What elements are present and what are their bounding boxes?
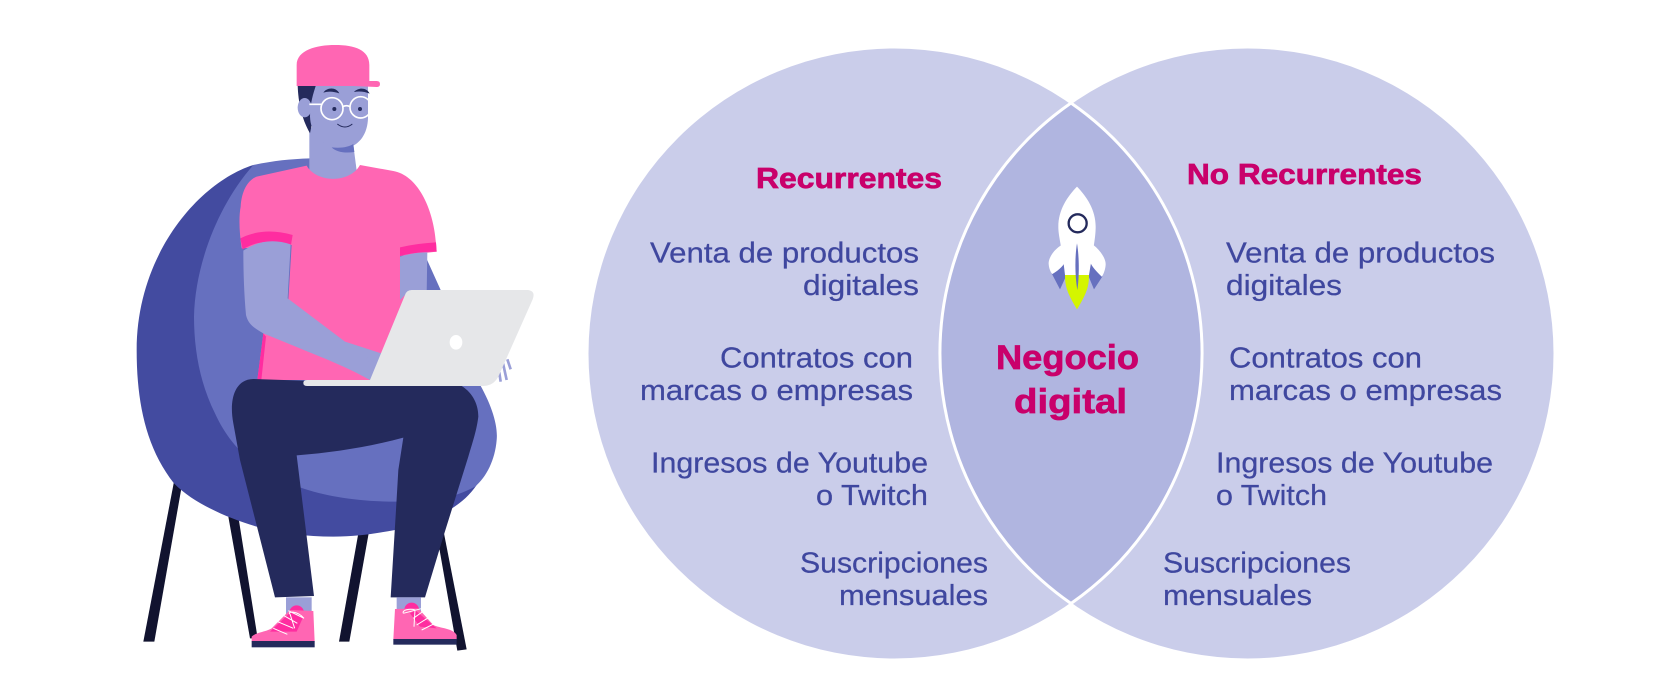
smile	[337, 124, 352, 127]
item: Ingresos de Youtube o Twitch	[651, 447, 928, 512]
item: Contratos con marcas o empresas	[640, 342, 913, 407]
item: Contratos con marcas o empresas: marcas o empresas	[640, 375, 913, 407]
item: Ingresos de Youtube o Twitch: o Twitch	[1216, 480, 1327, 512]
cap	[297, 45, 380, 87]
item: Suscripciones mensuales: Suscripciones	[1163, 547, 1351, 579]
centre label: Negocio digital: digital	[1014, 383, 1127, 421]
shirt edge shadow	[257, 333, 266, 380]
eyes	[332, 107, 362, 111]
rocket body	[1058, 187, 1096, 275]
rocket side fins	[1052, 262, 1102, 289]
item: Venta de productos digitales: Venta de productos	[650, 237, 919, 269]
right column: No Recurrentes	[1163, 159, 1502, 612]
rocket wings	[1049, 245, 1106, 277]
icon: rocket	[1049, 187, 1106, 309]
centre label: Negocio digital: Negocio	[996, 339, 1139, 377]
item: Ingresos de Youtube o Twitch	[1216, 447, 1493, 512]
centre label: Negocio digital	[996, 339, 1139, 421]
infographic canvas	[136, 45, 1554, 658]
eyebrows	[323, 88, 370, 94]
trousers	[232, 379, 478, 597]
item: Suscripciones mensuales: Suscripciones	[800, 547, 988, 579]
item: Suscripciones mensuales: mensuales	[1163, 580, 1312, 612]
left circle	[588, 48, 1200, 658]
glasses	[309, 97, 371, 120]
rocket centre fin	[1075, 243, 1079, 290]
item: Contratos con marcas o empresas: Contratos con	[720, 342, 913, 374]
sleeve cuffs	[240, 232, 437, 256]
item: Contratos con marcas o empresas: Contratos con	[1229, 342, 1422, 374]
item: Contratos con marcas o empresas: marcas o empresas	[1229, 375, 1502, 407]
item: Suscripciones mensuales	[1163, 547, 1351, 612]
venn diagram	[588, 48, 1554, 658]
right arm	[400, 252, 427, 300]
left column: Recurrentes	[640, 163, 988, 612]
item: Venta de productos digitales: digitales	[803, 270, 919, 302]
hand fingers	[364, 358, 511, 382]
item: Suscripciones mensuales	[800, 547, 988, 612]
t-shirt	[239, 165, 437, 380]
item: Ingresos de Youtube o Twitch: Ingresos de Youtube	[1216, 447, 1493, 479]
item: Venta de productos digitales: Venta de productos	[1226, 237, 1495, 269]
item: Venta de productos digitales	[650, 237, 919, 302]
item: Suscripciones mensuales: mensuales	[839, 580, 988, 612]
chair shell	[137, 165, 477, 537]
right circle	[942, 48, 1554, 658]
laptop	[303, 290, 534, 386]
item: Ingresos de Youtube o Twitch: Ingresos de Youtube	[651, 447, 928, 479]
illustration: person sitting on a chair with a laptop	[137, 45, 534, 651]
chair legs	[143, 482, 467, 651]
rocket flame	[1065, 275, 1089, 309]
rocket window	[1069, 214, 1087, 232]
overlap lens	[940, 103, 1202, 604]
chair cushion	[194, 158, 497, 502]
item: Venta de productos digitales: digitales	[1226, 270, 1342, 302]
left shoe	[252, 605, 315, 647]
item: Contratos con marcas o empresas	[1229, 342, 1502, 407]
right shoe	[393, 603, 457, 645]
socks	[286, 597, 421, 614]
heading: No Recurrentes: No Recurrentes	[1187, 159, 1422, 191]
neck	[309, 127, 358, 183]
chin shadow	[332, 144, 354, 152]
item: Venta de productos digitales	[1226, 237, 1495, 302]
item: Ingresos de Youtube o Twitch: o Twitch	[816, 480, 928, 512]
ear	[298, 98, 312, 117]
heading: Recurrentes: Recurrentes	[756, 163, 942, 195]
head	[310, 85, 368, 148]
hair	[298, 85, 317, 133]
left arm	[243, 241, 383, 380]
